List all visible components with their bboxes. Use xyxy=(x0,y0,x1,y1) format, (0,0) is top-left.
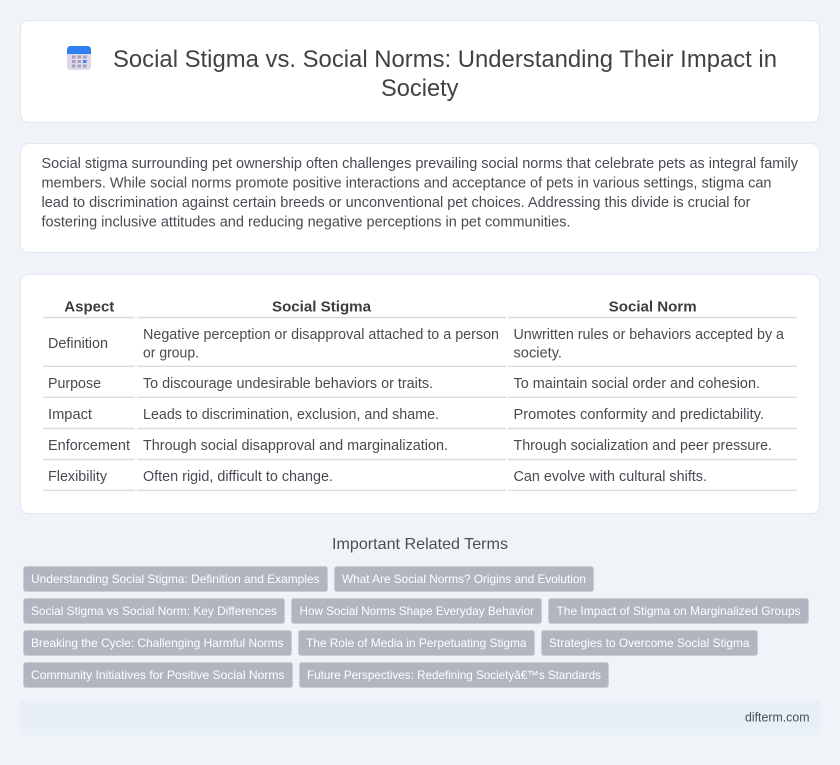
table row: Enforcement xyxy=(48,438,772,454)
tag row 4 xyxy=(24,662,608,688)
tag row 2 xyxy=(24,598,808,624)
tag row 2: How Social Norms Shape Everyday Behavior xyxy=(300,604,534,618)
table row: Flexibility xyxy=(48,469,707,485)
table header: Social Norm xyxy=(609,300,697,316)
tag row 3: Strategies to Overcome Social Stigma xyxy=(549,636,750,650)
title: Social Stigma vs. Social Norms: Understanding Their Impact in xyxy=(113,46,777,73)
table header: Aspect xyxy=(64,300,115,316)
table row: Flexibility: Often rigid, difficult to change. xyxy=(143,469,333,485)
table row: Impact xyxy=(48,407,764,423)
text block: introduction paragraph: Social stigma surrounding pet ownership often challenges prevailing social norms that celebrate pets as integral family xyxy=(42,156,799,172)
panel: introduction xyxy=(20,144,820,252)
footer xyxy=(20,701,820,735)
table row: Impact: Impact xyxy=(48,407,92,423)
tag row 2: The Impact of Stigma on Marginalized Groups xyxy=(556,604,801,618)
table row: Definition: society. xyxy=(514,346,562,362)
text block: introduction paragraph: lead to discrimination against certain breeds or unconventional pet choices. Addressing this divide is crucial for xyxy=(42,195,751,211)
table row: Enforcement: Through social disapproval and marginalization. xyxy=(143,438,448,454)
table row: Definition: Definition xyxy=(48,336,108,352)
related term tags xyxy=(24,566,808,688)
table row: Definition: Unwritten rules or behaviors accepted by a xyxy=(514,327,784,343)
table row: Flexibility: Flexibility xyxy=(48,469,108,485)
table row: Definition: or group. xyxy=(143,346,199,362)
table header: Social Stigma xyxy=(272,300,372,316)
table row: Definition: Negative perception or disapproval attached to a person xyxy=(143,327,499,343)
tag row 1: Understanding Social Stigma: Definition and Examples xyxy=(31,572,320,586)
tag row 1: What Are Social Norms? Origins and Evolution xyxy=(342,572,586,586)
table row: Purpose xyxy=(48,376,760,392)
panel: comparison table xyxy=(20,274,820,514)
tag row 1 xyxy=(24,566,594,592)
tag row 4: Community Initiatives for Positive Social Norms xyxy=(31,668,285,682)
table row: Flexibility: Can evolve with cultural shifts. xyxy=(514,469,707,485)
table row: Enforcement: Enforcement xyxy=(48,438,130,454)
table row: Impact: Promotes conformity and predictability. xyxy=(514,407,764,423)
heading: related terms: Important Related Terms xyxy=(332,536,508,553)
tag row 3: The Role of Media in Perpetuating Stigma xyxy=(306,636,527,650)
tag row 2: Social Stigma vs Social Norm: Key Differences xyxy=(31,604,277,618)
table row: Purpose: To maintain social order and cohesion. xyxy=(514,376,760,392)
title xyxy=(113,46,777,102)
table row: Definition xyxy=(48,327,784,362)
tag row 4: Future Perspectives: Redefining Societyâ€™s Standards xyxy=(307,668,601,682)
tag row 3 xyxy=(24,630,758,656)
tag row 3: Breaking the Cycle: Challenging Harmful Norms xyxy=(31,636,284,650)
table row: Purpose: Purpose xyxy=(48,376,101,392)
footer: difterm.com xyxy=(745,711,810,725)
title: Society xyxy=(381,75,458,102)
table row: Impact: Leads to discrimination, exclusion, and shame. xyxy=(143,407,439,423)
text block: introduction paragraph: fostering inclusive attitudes and reducing negative perceptions in pet communities. xyxy=(42,214,570,230)
table header xyxy=(64,300,697,316)
icon: calendar xyxy=(67,46,91,70)
table row: Enforcement: Through socialization and peer pressure. xyxy=(514,438,772,454)
panel: title header xyxy=(20,20,820,122)
table row: Purpose: To discourage undesirable behaviors or traits. xyxy=(143,376,433,392)
text block: introduction paragraph xyxy=(42,156,799,230)
text block: introduction paragraph: members. While social norms promote positive interactions and acceptance of pets in various settings, stigma can xyxy=(42,176,772,192)
